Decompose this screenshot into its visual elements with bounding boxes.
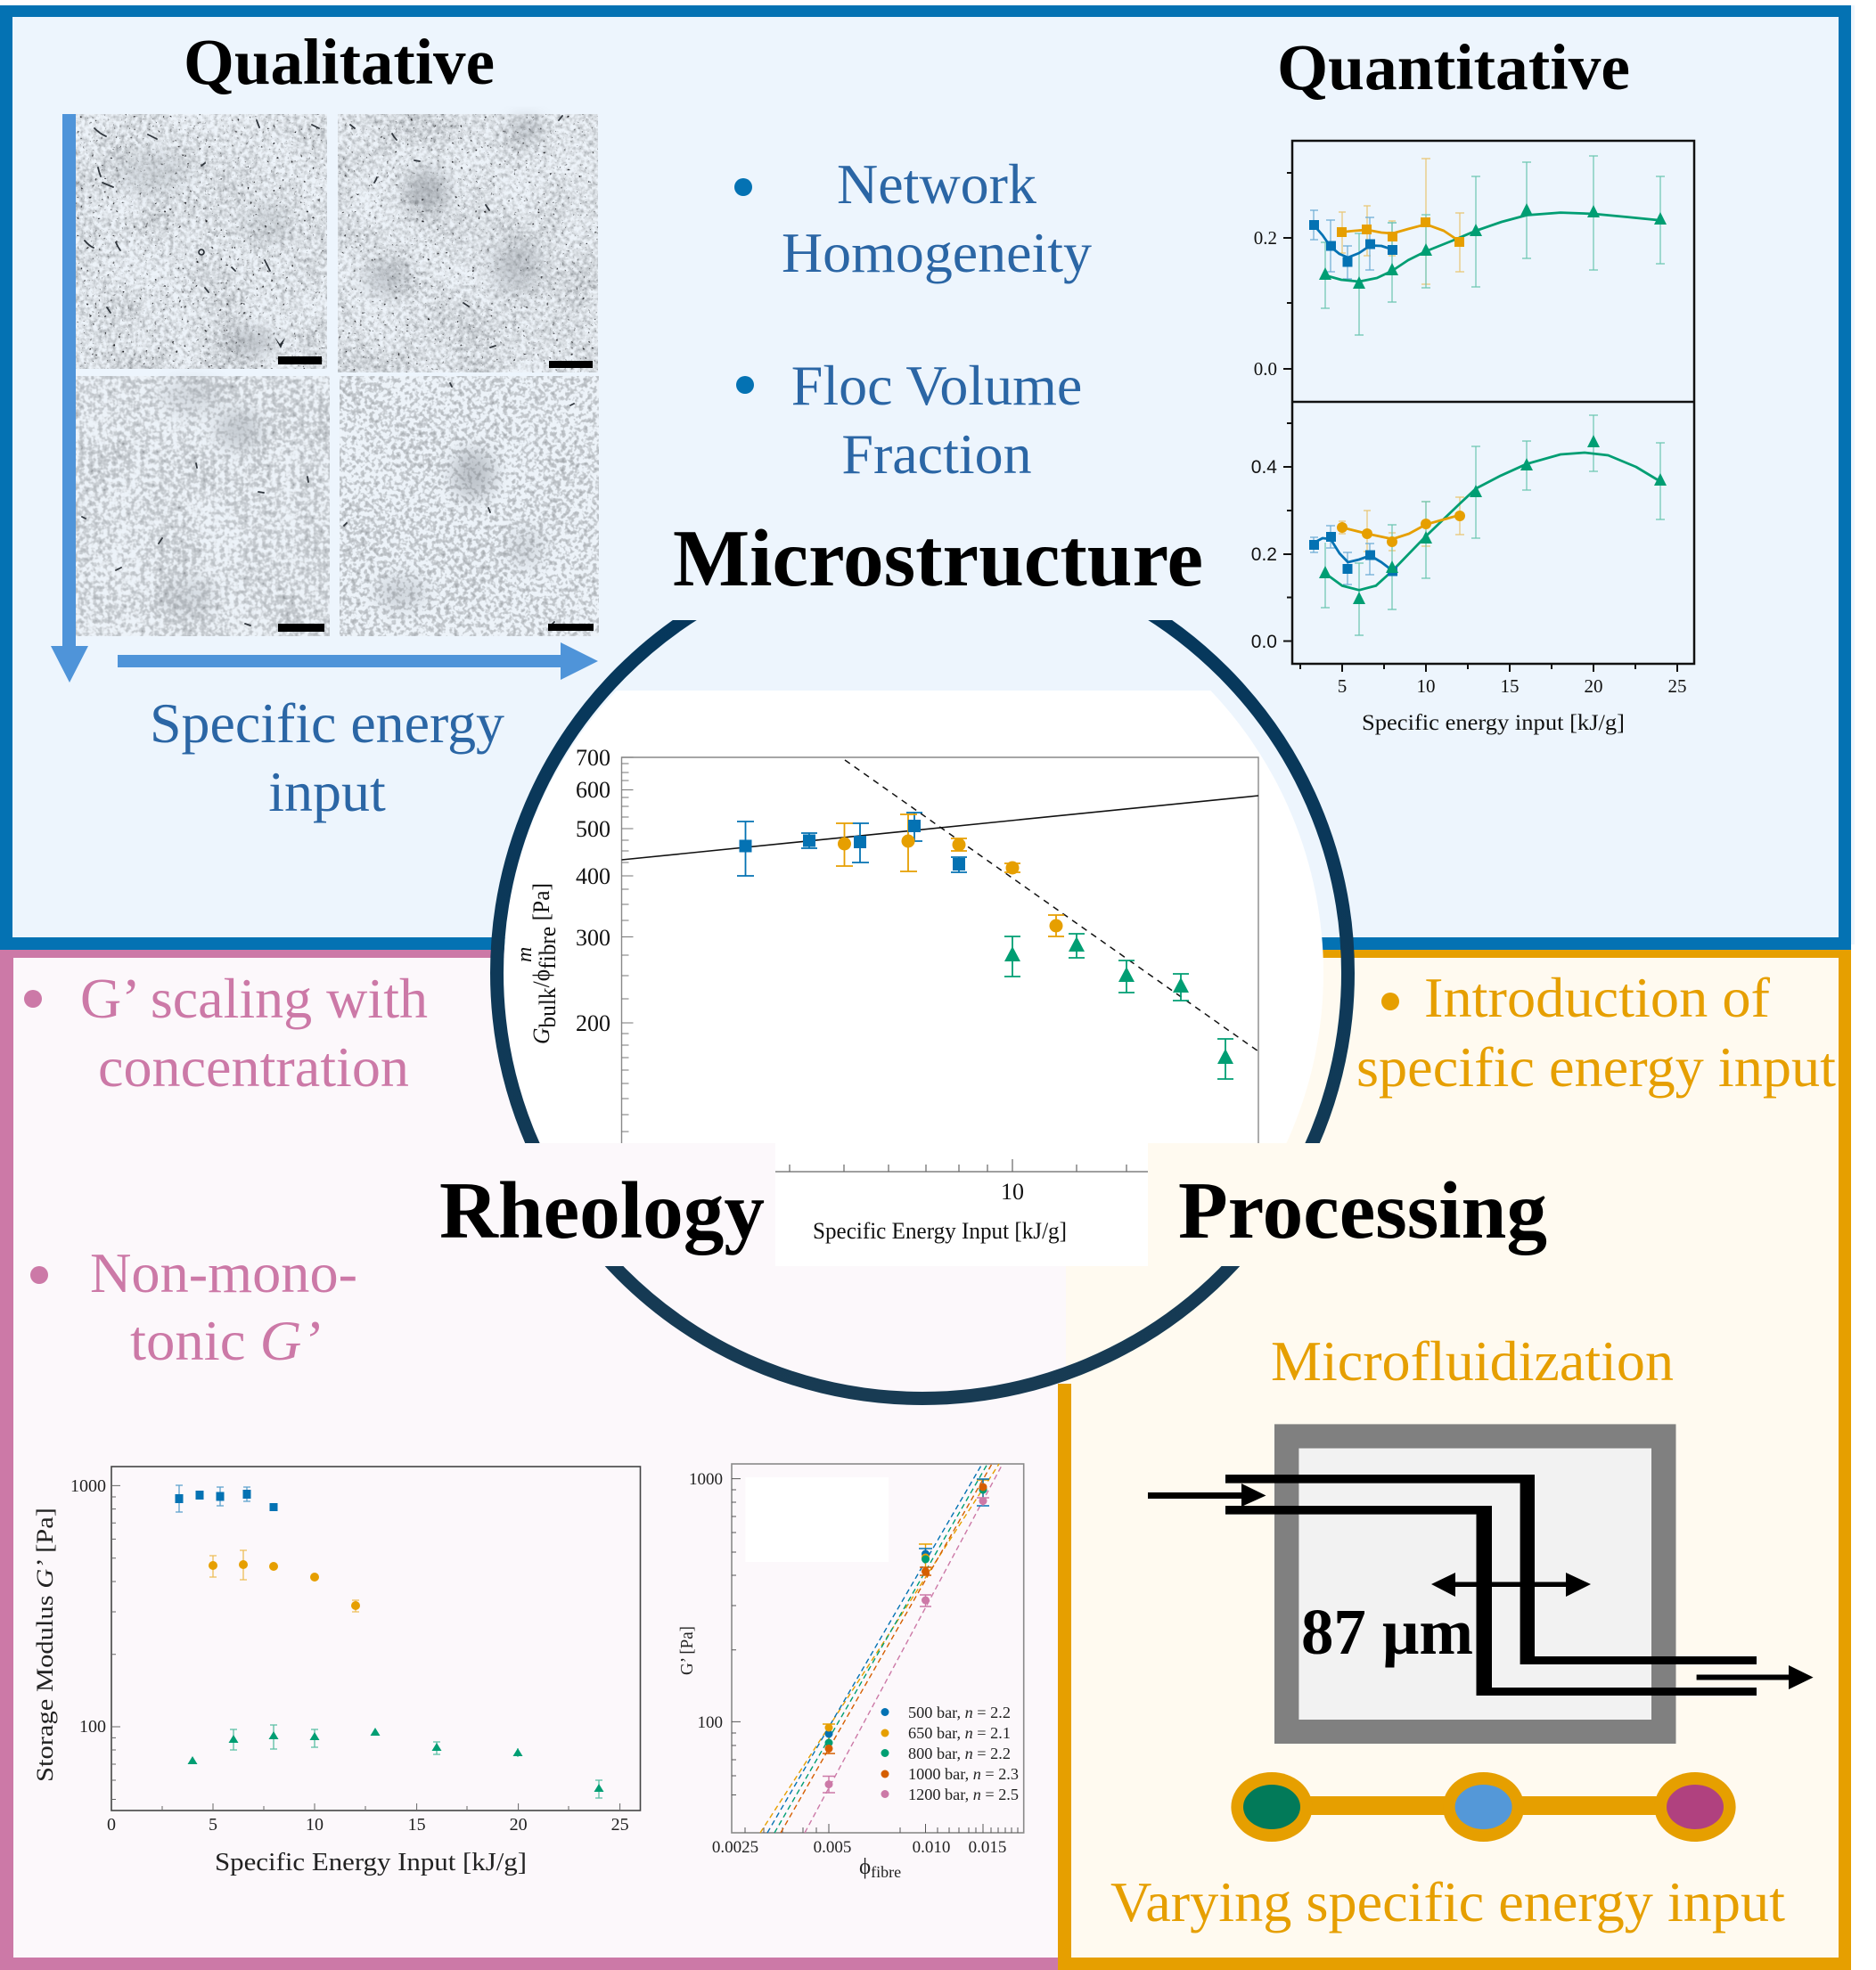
bullet list: microstructure measures: Floc Volume (791, 354, 1082, 417)
chart: normalised modulus vs specific energy (513, 745, 1258, 1244)
x axis labels (107, 1815, 629, 1835)
plot frame (732, 1464, 1024, 1833)
micrographs grid (76, 114, 599, 636)
bullet list: processing: Introduction of (1424, 966, 1771, 1029)
selector node: green (1231, 1772, 1313, 1842)
y axis title: /ϕ (528, 969, 554, 987)
x axis labels: 0.0025 (712, 1838, 758, 1857)
arrow: horizontal energy direction (118, 642, 598, 680)
diagram: energy input selector (1231, 1772, 1736, 1842)
chart: quantitative stacked plots (1251, 141, 1694, 735)
error bars (823, 1479, 989, 1793)
y axis labels: 1000 (689, 1470, 723, 1489)
micrograph bottom-left (76, 376, 330, 636)
bullet list: rheology (24, 967, 428, 1372)
y axis title: G’ [Pa] (677, 1626, 697, 1675)
bullet list: microstructure measures (734, 152, 1092, 486)
panel: microstructure background (0, 5, 1851, 950)
x axis title: fibre (871, 1863, 901, 1881)
bullet list: processing (1356, 966, 1836, 1099)
x axis labels: 10 (306, 1815, 324, 1835)
bullet list: microstructure measures: Fraction (841, 422, 1032, 486)
panel: rheology upper-right fill (891, 950, 1066, 1384)
panel: rheology fill (13, 958, 1058, 1958)
panel: microstructure outer haze (1845, 5, 1855, 944)
y axis labels: 700 (576, 745, 610, 771)
error bars (1310, 156, 1665, 635)
arrow: channel width (1431, 1573, 1591, 1597)
bullet list: rheology: Non-mono- (90, 1241, 357, 1304)
scale bar (548, 624, 594, 631)
y axis labels: 300 (576, 925, 610, 951)
arrow: inlet (1148, 1484, 1266, 1507)
plot frame (622, 757, 1258, 1143)
microstructure label backing (659, 526, 1185, 620)
heading: Microstructure: Microstructure (673, 513, 1203, 603)
y axis labels: 400 (576, 863, 610, 889)
y axis labels: 0.4 (1251, 457, 1277, 478)
upper channel wall (1225, 1475, 1757, 1664)
legend: 500 bar, n = 2.2 (908, 1704, 1011, 1721)
error bars (737, 813, 1233, 1079)
text: varying specific energy input: Varying specific energy input (1110, 1870, 1785, 1933)
chart: modulus vs fibre fraction (677, 1464, 1024, 1881)
trend curves (1314, 213, 1661, 590)
micrograph top-left (76, 114, 327, 369)
series markers: orange squares and circles (1337, 217, 1465, 547)
x axis labels: 0.010 (913, 1838, 950, 1857)
chart frame (1292, 141, 1694, 664)
x axis labels: 15 (1501, 675, 1519, 697)
heading: Processing: Processing (1178, 1165, 1547, 1255)
error bars (176, 1485, 602, 1798)
x axis labels: 5 (209, 1815, 217, 1835)
y axis labels: 0.0 (1254, 358, 1277, 380)
y axis labels (689, 1470, 723, 1732)
legend (881, 1704, 1019, 1803)
x axis labels (712, 1838, 1006, 1857)
y axis labels (70, 1476, 106, 1737)
scale bar (278, 624, 324, 632)
white legend mask (745, 1477, 889, 1562)
x axis labels: 20 (510, 1815, 528, 1835)
panel: processing background (1058, 950, 1851, 1970)
x axis tick label: 10 (1001, 1179, 1024, 1205)
y axis title: fibre (535, 927, 561, 969)
circle ring linking the three topics (497, 547, 1348, 1399)
x axis labels: 10 (1417, 675, 1435, 697)
y axis title (513, 883, 561, 1044)
white plot disc (481, 691, 1364, 1266)
y axis labels: 1000 (70, 1476, 106, 1496)
text: specific energy input (150, 691, 504, 823)
chamber outer wall (1274, 1424, 1675, 1744)
x axis title: Specific energy input [kJ/g] (1362, 711, 1625, 735)
arrow: outlet (1697, 1665, 1814, 1689)
y axis labels: 200 (576, 1010, 610, 1036)
selector node: blue (1443, 1772, 1524, 1842)
y axis labels: 100 (79, 1717, 106, 1737)
y axis labels: 0.2 (1251, 544, 1277, 565)
x axis title: Specific Energy Input [kJ/g] (215, 1849, 527, 1876)
fit lines (760, 1464, 1003, 1833)
text: specific energy input: input (268, 760, 386, 823)
plot frame (111, 1467, 640, 1811)
markers (740, 820, 965, 871)
x axis labels (1338, 675, 1686, 697)
y axis labels (1251, 227, 1277, 652)
legend: 800 bar, n = 2.2 (908, 1745, 1011, 1762)
markers (825, 1483, 987, 1788)
arrow: vertical energy direction (51, 114, 88, 683)
panel: rheology background (0, 950, 1061, 1970)
x axis labels: 20 (1585, 675, 1602, 697)
y axis title: m (513, 947, 537, 962)
panel: microstructure fill (12, 17, 1839, 937)
y axis labels: 600 (576, 777, 610, 803)
y axis labels: 0.0 (1251, 632, 1277, 652)
fit lines (622, 796, 1258, 860)
minor y ticks (622, 757, 633, 1132)
bullet list: microstructure measures: Homogeneity (782, 221, 1092, 284)
selector node: magenta (1654, 1772, 1736, 1842)
x axis labels: 25 (611, 1815, 629, 1835)
y axis labels (576, 745, 610, 1036)
chamber interior (1298, 1449, 1651, 1720)
x axis labels: 0.005 (814, 1838, 851, 1857)
x axis labels: 0.015 (969, 1838, 1006, 1857)
legend: 1000 bar, n = 2.3 (908, 1765, 1019, 1783)
x axis labels: 25 (1668, 675, 1686, 697)
bullet list: rheology: tonic G’ (130, 1309, 321, 1372)
bullet list: rheology: G’ scaling with (80, 967, 428, 1030)
scale bar (549, 361, 593, 368)
x axis labels: 5 (1338, 675, 1347, 697)
x axis labels: 0 (107, 1815, 116, 1835)
micrograph bottom-right (340, 376, 599, 636)
bullet list: rheology: concentration (98, 1035, 409, 1099)
y axis labels: 100 (697, 1713, 723, 1732)
x axis labels: 15 (408, 1815, 426, 1835)
heading: Quantitative: Quantitative (1277, 31, 1630, 103)
y axis labels: 500 (576, 816, 610, 842)
y axis title: Storage Modulus G’ [Pa] (32, 1508, 58, 1782)
micrograph top-right (338, 114, 598, 372)
heading: Microfluidization: Microfluidization (1271, 1329, 1674, 1393)
bullet list: processing: specific energy input (1356, 1035, 1836, 1099)
bullet list: microstructure measures: Network (837, 152, 1036, 216)
scale bar (278, 356, 322, 364)
legend: 1200 bar, n = 2.5 (908, 1786, 1019, 1803)
series markers: green triangles (1319, 203, 1667, 604)
panel: processing fill (1066, 958, 1839, 1958)
lower channel wall (1225, 1506, 1757, 1696)
y axis title: G (528, 1027, 554, 1044)
y axis labels: 0.2 (1254, 227, 1277, 249)
legend: 650 bar, n = 2.1 (908, 1724, 1011, 1742)
label: channel width: 87 μm (1301, 1596, 1473, 1668)
heading: Qualitative: Qualitative (184, 26, 495, 98)
heading: Rheology: Rheology (439, 1165, 765, 1255)
x axis title: ϕ (859, 1855, 871, 1879)
markers (175, 1490, 278, 1511)
x axis title: Specific Energy Input [kJ/g] (813, 1218, 1067, 1244)
y axis title: [Pa] (528, 883, 554, 927)
processing label backing (1148, 1143, 1337, 1266)
text: specific energy input: Specific energy (150, 691, 504, 755)
rheology label backing (472, 1143, 775, 1266)
bottom axis (775, 1159, 1148, 1172)
chart: storage modulus vs specific energy (32, 1467, 640, 1876)
y axis title: bulk (535, 987, 561, 1028)
series markers: blue squares (1309, 220, 1397, 576)
diagram: microfluidizer channel (1148, 1424, 1814, 1744)
